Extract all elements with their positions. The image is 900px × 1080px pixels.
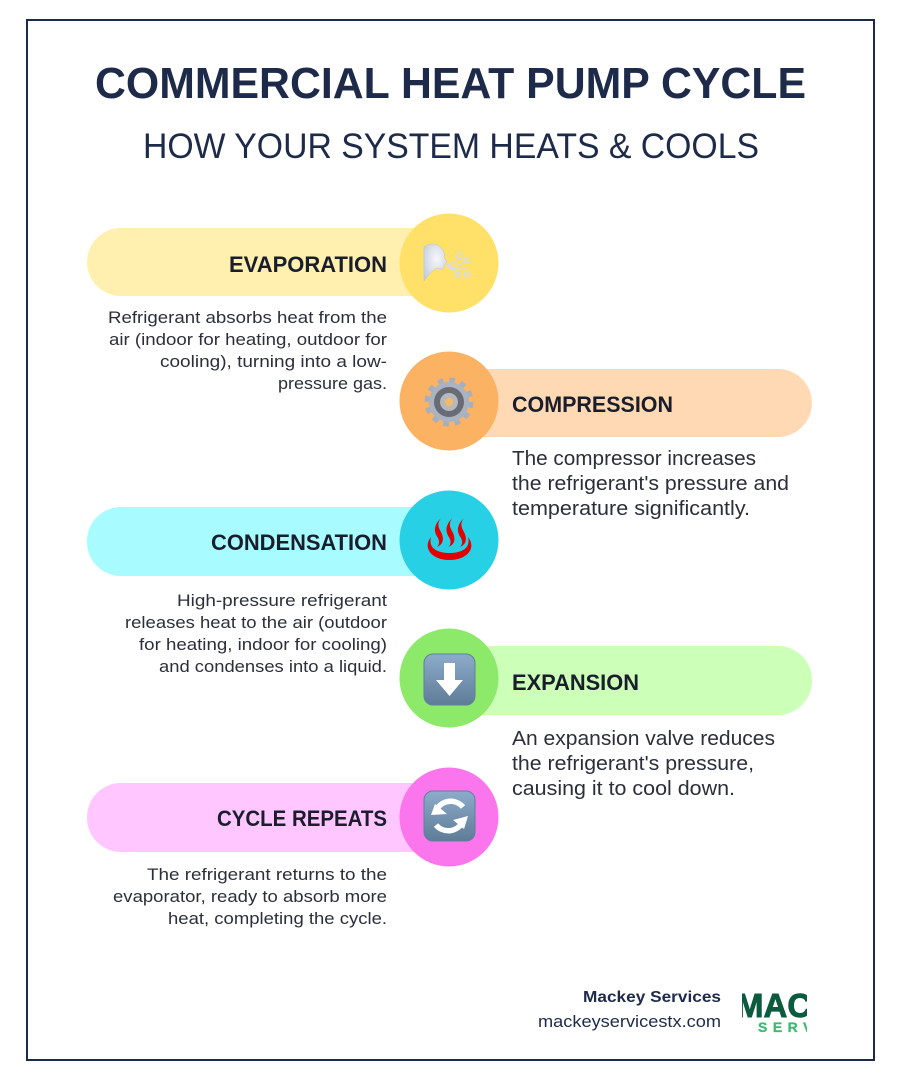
evaporation circle	[400, 214, 498, 312]
compression description: the refrigerant's pressure and	[512, 473, 789, 495]
condensation description: High-pressure refrigerant	[177, 591, 387, 610]
cycle repeats heading: CYCLE REPEATS	[217, 806, 387, 831]
footer: website: mackeyservicestx.com	[538, 1012, 721, 1031]
expansion description: An expansion valve reduces	[512, 728, 775, 750]
condensation heading: CONDENSATION	[211, 530, 387, 555]
compression circle	[400, 352, 498, 450]
subtitle: HOW YOUR SYSTEM HEATS & COOLS	[143, 127, 759, 166]
panel: evaporation	[87, 214, 498, 393]
compression description	[512, 448, 789, 520]
footer: company name: Mackey Services	[583, 989, 721, 1006]
evaporation description: air (indoor for heating, outdoor for	[109, 330, 387, 349]
title: COMMERCIAL HEAT PUMP CYCLE	[95, 59, 806, 108]
cycle repeats description	[113, 865, 387, 928]
panel: cycle repeats	[87, 768, 498, 928]
icon: repeat arrows	[424, 791, 475, 841]
compression description: temperature significantly.	[512, 498, 750, 520]
panel: compression	[400, 352, 812, 520]
cycle repeats pill	[87, 783, 467, 852]
condensation description: releases heat to the air (outdoor	[125, 613, 387, 632]
expansion circle	[400, 628, 498, 728]
logo: SERV	[758, 1019, 818, 1035]
expansion heading: EXPANSION	[512, 670, 639, 695]
condensation description: for heating, indoor for cooling)	[139, 635, 387, 654]
evaporation description: cooling), turning into a low-	[160, 352, 387, 371]
expansion description: causing it to cool down.	[512, 778, 735, 800]
expansion description	[512, 728, 775, 800]
icon: blowing wind face	[424, 244, 470, 281]
evaporation pill	[87, 228, 467, 296]
expansion pill	[432, 646, 812, 715]
cycle repeats circle	[400, 768, 498, 866]
condensation circle	[400, 490, 498, 590]
evaporation description: pressure gas.	[278, 374, 387, 393]
icon: down arrow	[424, 654, 475, 705]
icon: gear	[428, 381, 470, 423]
evaporation description: Refrigerant absorbs heat from the	[108, 308, 387, 327]
panel: condensation	[87, 490, 498, 676]
evaporation heading: EVAPORATION	[229, 252, 387, 277]
expansion description: the refrigerant's pressure,	[512, 753, 754, 775]
compression heading: COMPRESSION	[512, 392, 673, 417]
cycle repeats description: The refrigerant returns to the	[147, 865, 387, 884]
icon: hot springs	[428, 518, 471, 560]
cycle repeats description: heat, completing the cycle.	[168, 909, 387, 928]
condensation pill	[87, 507, 467, 576]
compression pill	[432, 369, 812, 437]
compression description: The compressor increases	[512, 448, 756, 470]
panel: expansion	[400, 628, 812, 800]
condensation description: and condenses into a liquid.	[159, 657, 387, 676]
cycle repeats description: evaporator, ready to absorb more	[113, 887, 387, 906]
logo: MAC	[736, 987, 811, 1024]
condensation description	[125, 591, 387, 676]
evaporation description	[108, 308, 387, 393]
